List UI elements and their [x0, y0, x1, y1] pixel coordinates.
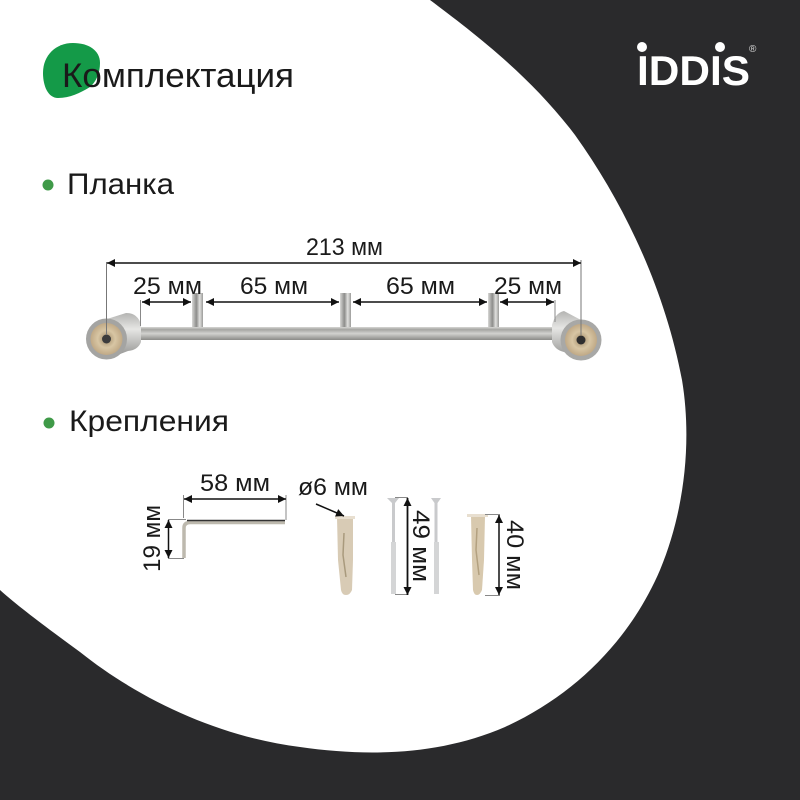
- icon: green blob behind title: [43, 43, 100, 98]
- rail product photo with end mounts: [86, 293, 602, 360]
- wall plug 2 with dimension: [467, 514, 528, 596]
- hex key with dimensions: 58 мм: [200, 470, 270, 497]
- rail dimensions: 25 мм: [133, 273, 202, 300]
- pegs: [192, 293, 203, 327]
- logo: iddis: IDDIS: [637, 47, 750, 94]
- hex key with dimensions: [139, 470, 286, 572]
- left mount: [86, 313, 141, 360]
- main bar: [130, 327, 560, 340]
- wall plug 1 with diameter label: [298, 474, 368, 595]
- rail dimensions: 25 мм: [494, 273, 562, 300]
- rail dimensions: 65 мм: [240, 273, 308, 300]
- rail dimensions: [106, 234, 581, 335]
- right mount: [552, 311, 602, 360]
- section bullet: Планка: Планка: [67, 168, 174, 201]
- title: Комплектация: [62, 57, 294, 95]
- screws with dimension: 49 мм: [407, 510, 434, 582]
- logo: iddis: ®: [749, 44, 757, 55]
- rail dimensions: 213 мм: [306, 234, 383, 261]
- section bullet: Крепления: Крепления: [69, 405, 229, 438]
- wall plug 2 with dimension: 40 мм: [501, 520, 528, 590]
- screws with dimension: [387, 498, 441, 595]
- rail dimensions: 65 мм: [386, 273, 455, 300]
- hex key with dimensions: 19 мм: [139, 505, 166, 572]
- wall plug 1 with diameter label: ø6 мм: [298, 474, 368, 501]
